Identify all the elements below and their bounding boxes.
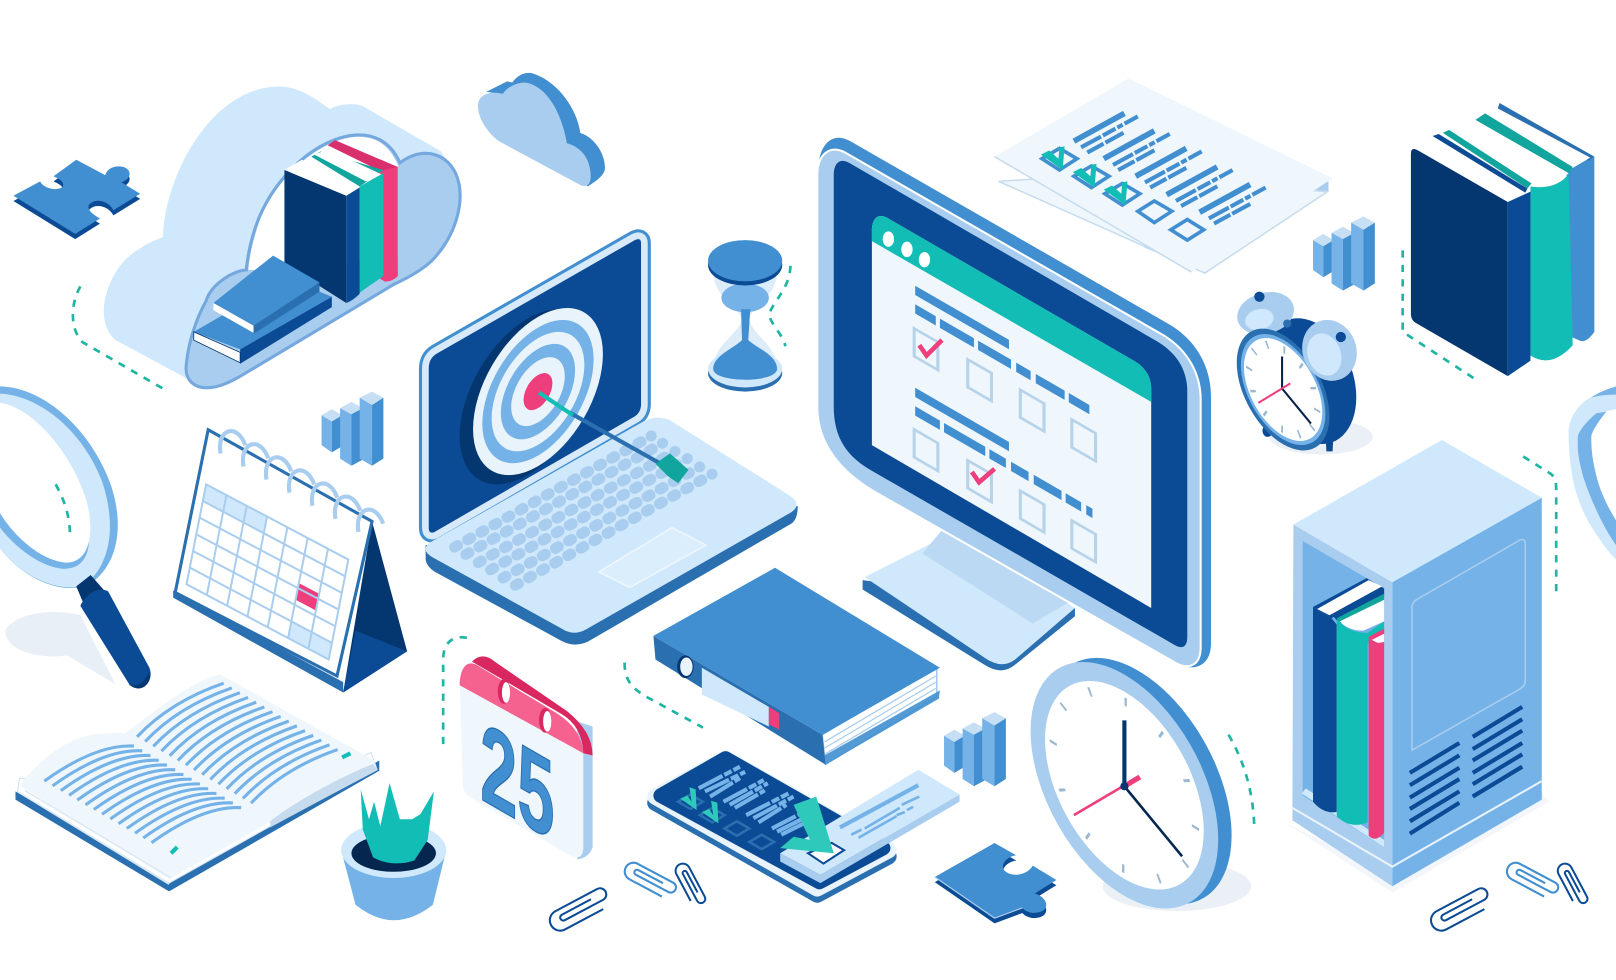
laptop lid — [429, 239, 641, 533]
checklist rows — [1074, 113, 1266, 224]
dashed connector lines — [73, 250, 1556, 826]
icon: paper clips right — [1427, 860, 1589, 934]
base line — [1292, 781, 1542, 867]
icon: paper clips left — [546, 860, 707, 934]
calendar grid — [187, 484, 348, 660]
checklist card — [780, 795, 960, 883]
icon: bar chart beside calendar — [322, 392, 383, 466]
icon: potted plant — [341, 783, 446, 920]
monitor bezel — [818, 138, 1211, 667]
icon: cloud with books — [104, 87, 462, 388]
icon: storage cabinet with books — [1285, 440, 1549, 892]
target — [460, 279, 603, 514]
cabinet opening — [1303, 541, 1384, 847]
keyboard — [454, 436, 712, 585]
books in cabinet — [1313, 578, 1384, 839]
door panel — [1412, 539, 1525, 750]
left bell — [1232, 286, 1299, 341]
quiz form — [914, 285, 1096, 562]
phone list lines — [699, 767, 804, 835]
hands — [1258, 357, 1311, 424]
icon: wall clock — [1031, 616, 1251, 950]
text lines on pages — [137, 683, 338, 803]
red check marks — [919, 340, 995, 482]
vents — [1410, 707, 1522, 834]
icon: open book — [15, 674, 379, 891]
right bell — [1294, 312, 1365, 389]
icon: alarm clock — [1232, 286, 1373, 471]
icon: page-a-day calendar showing 25 — [460, 656, 593, 866]
icon: smartphone with checklist card — [655, 758, 960, 894]
browser window — [872, 216, 1151, 608]
laptop — [426, 239, 798, 645]
icon: hourglass — [708, 240, 782, 392]
computer monitor — [817, 138, 1211, 670]
icon: magnifying glass — [0, 386, 151, 688]
trackpad — [599, 528, 706, 587]
arrow in target — [539, 393, 688, 483]
icon: stacked checklist papers — [995, 78, 1333, 273]
monitor stand — [863, 580, 1075, 670]
date number: 25 — [480, 697, 554, 866]
clock hands — [1122, 720, 1126, 785]
icon: puzzle piece top left — [13, 160, 140, 239]
clock face — [1237, 308, 1329, 471]
checkboxes — [1042, 148, 1204, 240]
large tick — [780, 797, 834, 853]
icon: small cloud — [478, 73, 605, 187]
icon: desk calendar — [173, 430, 407, 692]
books lying flat — [194, 256, 332, 364]
icon: bar chart top right — [1313, 216, 1375, 291]
icon: bar chart beside clock — [944, 712, 1006, 786]
spiral rings — [220, 431, 383, 532]
books standing — [284, 140, 398, 303]
icon: standing books top right — [1411, 103, 1594, 376]
icon: puzzle piece bottom — [935, 843, 1056, 923]
icon: ring binder — [653, 568, 940, 765]
icon: magnifying glass repeated at right edge — [1569, 386, 1616, 560]
laptop base — [426, 506, 798, 645]
